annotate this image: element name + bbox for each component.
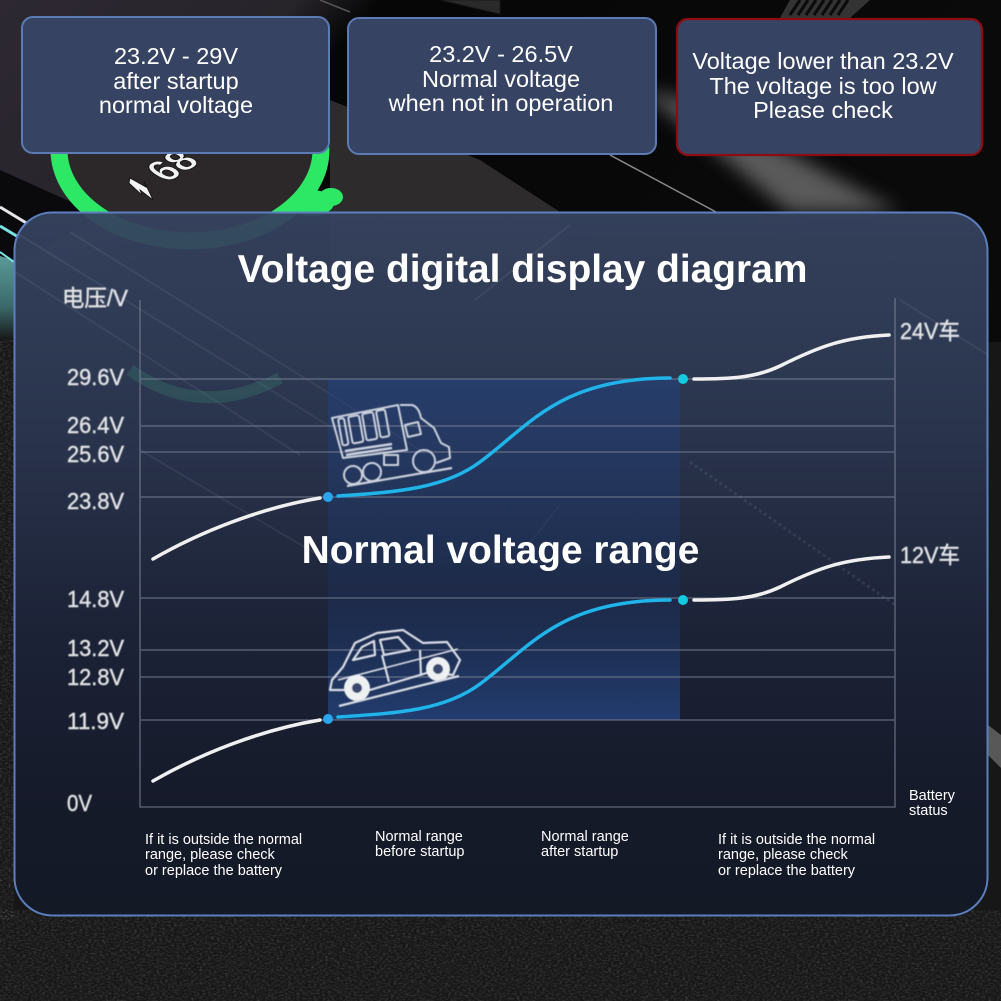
callout: low voltage warning: The voltage is too low <box>709 73 938 99</box>
note: battery status axis: status <box>909 803 948 819</box>
y axis labels <box>62 285 129 816</box>
normal range highlight <box>328 379 680 720</box>
y axis labels: 13.2V <box>67 635 125 661</box>
y axis labels: 0V <box>67 790 93 816</box>
note: after startup: after startup <box>541 844 618 860</box>
series labels <box>900 318 960 568</box>
y axis labels: 29.6V <box>67 364 125 390</box>
callout: low voltage warning: Please check <box>753 97 893 123</box>
gauge reading: 68 <box>136 144 210 188</box>
callout: not in operation voltage <box>348 18 656 154</box>
note: after startup: Normal range <box>541 829 629 845</box>
title: Voltage digital display diagram <box>238 248 807 291</box>
y axis labels: 23.8V <box>67 488 125 514</box>
note: outside range left: If it is outside the normal <box>145 832 302 848</box>
note: outside range right: range, please check <box>718 847 849 863</box>
callout: after startup voltage: 23.2V - 29V <box>114 43 238 69</box>
series labels: 12V车 <box>900 542 960 568</box>
note: before startup: before startup <box>375 844 464 860</box>
chart frame and gridlines <box>140 298 895 807</box>
callout: after startup voltage: normal voltage <box>99 92 253 118</box>
callout: after startup voltage <box>22 17 329 153</box>
y axis labels: 12.8V <box>67 664 125 690</box>
icon: car <box>330 630 460 706</box>
note: outside range right: or replace the battery <box>718 863 856 879</box>
gauge ring photo element <box>54 54 343 246</box>
note: before startup <box>375 829 464 860</box>
12V curve <box>153 557 889 781</box>
note: outside range left: range, please check <box>145 847 276 863</box>
note: before startup: Normal range <box>375 829 463 845</box>
callout: not in operation voltage: 23.2V - 26.5V <box>429 41 573 67</box>
note: outside range left: or replace the battery <box>145 863 283 879</box>
callout: low voltage warning: Voltage lower than 23.2V <box>692 48 954 74</box>
y axis labels: 14.8V <box>67 586 125 612</box>
note: outside range right <box>718 832 875 879</box>
note: after startup <box>541 829 629 860</box>
panel: voltage diagram <box>14 212 988 916</box>
24V curve <box>153 335 889 559</box>
callout: not in operation voltage: Normal voltage <box>422 66 580 92</box>
y axis labels: 26.4V <box>67 412 125 438</box>
y axis labels: 电压/V <box>62 285 129 311</box>
subtitle: Normal voltage range <box>302 529 699 572</box>
note: outside range left <box>145 832 302 879</box>
callout: after startup voltage: after startup <box>113 68 239 94</box>
note: battery status axis <box>909 788 956 819</box>
y axis labels: 11.9V <box>67 708 125 734</box>
icon: truck <box>332 405 452 486</box>
note: outside range right: If it is outside the normal <box>718 832 875 848</box>
series labels: 24V车 <box>900 318 960 344</box>
y axis labels: 25.6V <box>67 441 125 467</box>
icon: charging bolt <box>129 178 153 200</box>
callout: low voltage warning <box>677 19 982 155</box>
note: battery status axis: Battery <box>909 788 956 804</box>
callout: not in operation voltage: when not in operation <box>388 90 613 116</box>
